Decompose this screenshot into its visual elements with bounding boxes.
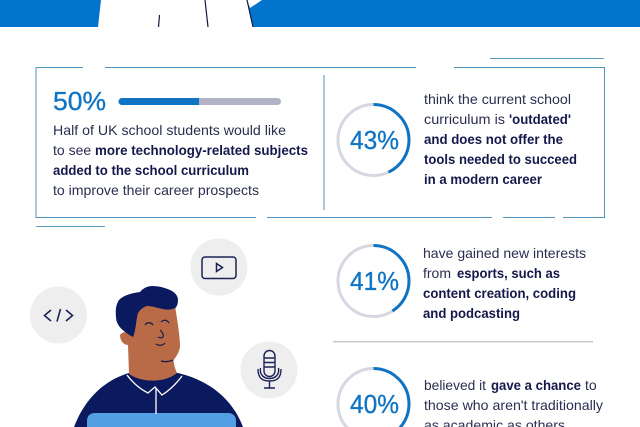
body	[74, 373, 243, 427]
text block: half of students: to improve their career prospects	[53, 182, 259, 198]
text block: gave a chance: believed it	[424, 377, 486, 393]
text block: outdated curriculum: think the current school	[424, 91, 571, 107]
text block: esports interests: content creation, coding	[423, 285, 576, 301]
icon: microphone	[240, 342, 298, 398]
text block: outdated curriculum: and does not offer the	[424, 131, 563, 147]
illustration: person	[74, 286, 243, 427]
text block: esports interests: esports, such as	[457, 265, 560, 281]
text block: half of students	[53, 122, 308, 198]
text block: outdated curriculum: in a modern career	[424, 171, 543, 187]
text block: esports interests: and podcasting	[423, 305, 520, 321]
donut: 40 percent	[338, 368, 409, 427]
text block: half of students: to see	[53, 142, 91, 158]
header band with cropped illustration	[0, 0, 640, 27]
text block: esports interests: have gained new interests	[423, 245, 586, 261]
icon: video play	[190, 238, 248, 296]
text block: gave a chance: gave a chance	[491, 377, 581, 393]
hair	[116, 286, 178, 337]
text block: outdated curriculum: 'outdated'	[509, 111, 571, 127]
progress bar: 50 percent	[118, 98, 281, 105]
text block: gave a chance: those who aren't traditionally	[424, 397, 603, 413]
donut: 41 percent: 41%	[350, 266, 399, 296]
donut: 43 percent: 43%	[350, 125, 399, 155]
text block: half of students: more technology-related subjects	[95, 142, 308, 158]
donut: 41 percent	[338, 246, 409, 316]
text block: gave a chance: to	[585, 377, 597, 393]
donut: 40 percent: 40%	[350, 389, 399, 419]
text block: esports interests	[423, 245, 586, 321]
divider	[333, 341, 593, 343]
text block: esports interests: from	[423, 265, 451, 281]
text block: outdated curriculum	[424, 91, 577, 187]
statistic: 50 percent: 50%	[53, 86, 106, 116]
text block: half of students: added to the school curriculum	[53, 162, 249, 178]
text block: half of students: Half of UK school students would like	[53, 122, 286, 138]
panel: key statistics box	[36, 58, 604, 226]
icon: code tag	[30, 286, 87, 344]
donut: 43 percent	[338, 104, 409, 176]
text block: outdated curriculum: curriculum is	[424, 111, 505, 127]
face details	[145, 320, 173, 362]
text block: gave a chance	[424, 377, 603, 427]
collar	[127, 375, 182, 414]
text block: outdated curriculum: tools needed to succeed	[424, 151, 577, 167]
laptop	[87, 413, 236, 427]
neck and face	[120, 305, 180, 381]
